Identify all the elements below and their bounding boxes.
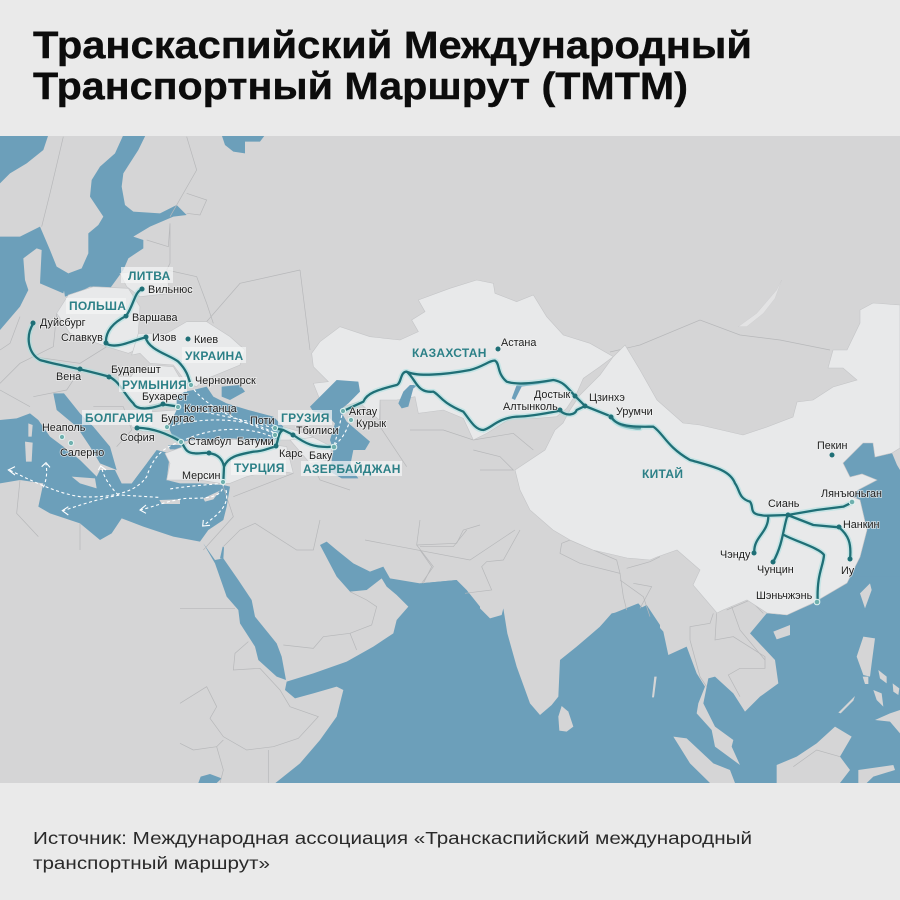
city labels: Неаполь: [42, 422, 86, 434]
city labels: Урумчи: [616, 406, 653, 418]
city labels: Стамбул: [188, 436, 231, 448]
country labels: КАЗАХСТАН: [412, 346, 487, 360]
city markers: [30, 286, 855, 605]
highlighted country: Kazakhstan: [312, 280, 613, 440]
country labels: ПОЛЬША: [69, 299, 126, 313]
country labels: БОЛГАРИЯ: [85, 411, 153, 425]
city labels: Киев: [194, 334, 218, 346]
country labels: КИТАЙ: [642, 466, 683, 481]
city labels: Черноморск: [195, 375, 256, 387]
route: China: [611, 417, 852, 602]
seas: [0, 135, 900, 783]
country labels: ЛИТВА: [128, 269, 171, 283]
city labels: Астана: [501, 337, 536, 349]
title: Транскаспийский Международный: [33, 25, 752, 67]
city labels: Салерно: [60, 447, 104, 459]
city labels: Изов: [152, 332, 177, 344]
route: Europe to Caspian: [29, 289, 334, 482]
city labels: Поти: [250, 415, 275, 427]
city labels: Вена: [56, 371, 81, 383]
city labels: Иу: [841, 565, 855, 577]
country labels: УКРАИНА: [185, 349, 243, 363]
city labels: Чэнду: [720, 549, 751, 561]
city labels: Шэньчжэнь: [756, 590, 813, 602]
highlighted countries: Europe and Caucasus: [57, 270, 332, 483]
country labels: ГРУЗИЯ: [281, 411, 330, 425]
city labels: Пекин: [817, 440, 848, 452]
city labels: Алтынколь: [503, 401, 558, 413]
city labels: Славкув: [61, 332, 103, 344]
city labels: Баку: [309, 450, 333, 462]
sea routes: dashed arrows: [8, 385, 350, 526]
city labels: Цзинхэ: [589, 392, 625, 404]
city labels: Чунцин: [757, 564, 794, 576]
city labels: Вильнюс: [148, 284, 193, 296]
city labels: Дуйсбург: [40, 317, 86, 329]
source note: транспортный маршрут»: [33, 853, 270, 873]
country labels: [66, 267, 683, 481]
city labels: Констанца: [184, 403, 237, 415]
city labels: Батуми: [237, 436, 274, 448]
city labels: Бургас: [161, 413, 195, 425]
city labels: Карс: [279, 448, 303, 460]
inland seas and lakes: [168, 280, 782, 478]
city labels: Достык: [534, 389, 571, 401]
city labels: Лянъюньган: [821, 488, 882, 500]
city labels: Сиань: [768, 498, 800, 510]
title: Транспортный Маршрут (ТМТМ): [33, 66, 688, 108]
source note: [33, 828, 752, 873]
city labels: Нанкин: [843, 519, 880, 531]
city labels: Тбилиси: [296, 425, 339, 437]
map: [0, 136, 900, 783]
country labels: РУМЫНИЯ: [122, 378, 187, 392]
city labels: Актау: [349, 406, 378, 418]
route: Kazakhstan: [343, 361, 640, 430]
country borders: [0, 137, 840, 783]
city labels: Курык: [356, 418, 386, 430]
source note: Источник: Международная ассоциация «Транскаспийский международный: [33, 828, 752, 848]
city labels: Мерсин: [182, 470, 221, 482]
city labels: Бухарест: [142, 391, 188, 403]
city labels: [40, 284, 882, 602]
title: [33, 25, 752, 108]
city labels: Варшава: [132, 312, 178, 324]
highlighted country: China: [515, 303, 900, 615]
country labels: ТУРЦИЯ: [234, 461, 285, 475]
country labels: АЗЕРБАЙДЖАН: [303, 461, 401, 476]
city labels: Будапешт: [111, 364, 161, 376]
city labels: София: [120, 432, 155, 444]
